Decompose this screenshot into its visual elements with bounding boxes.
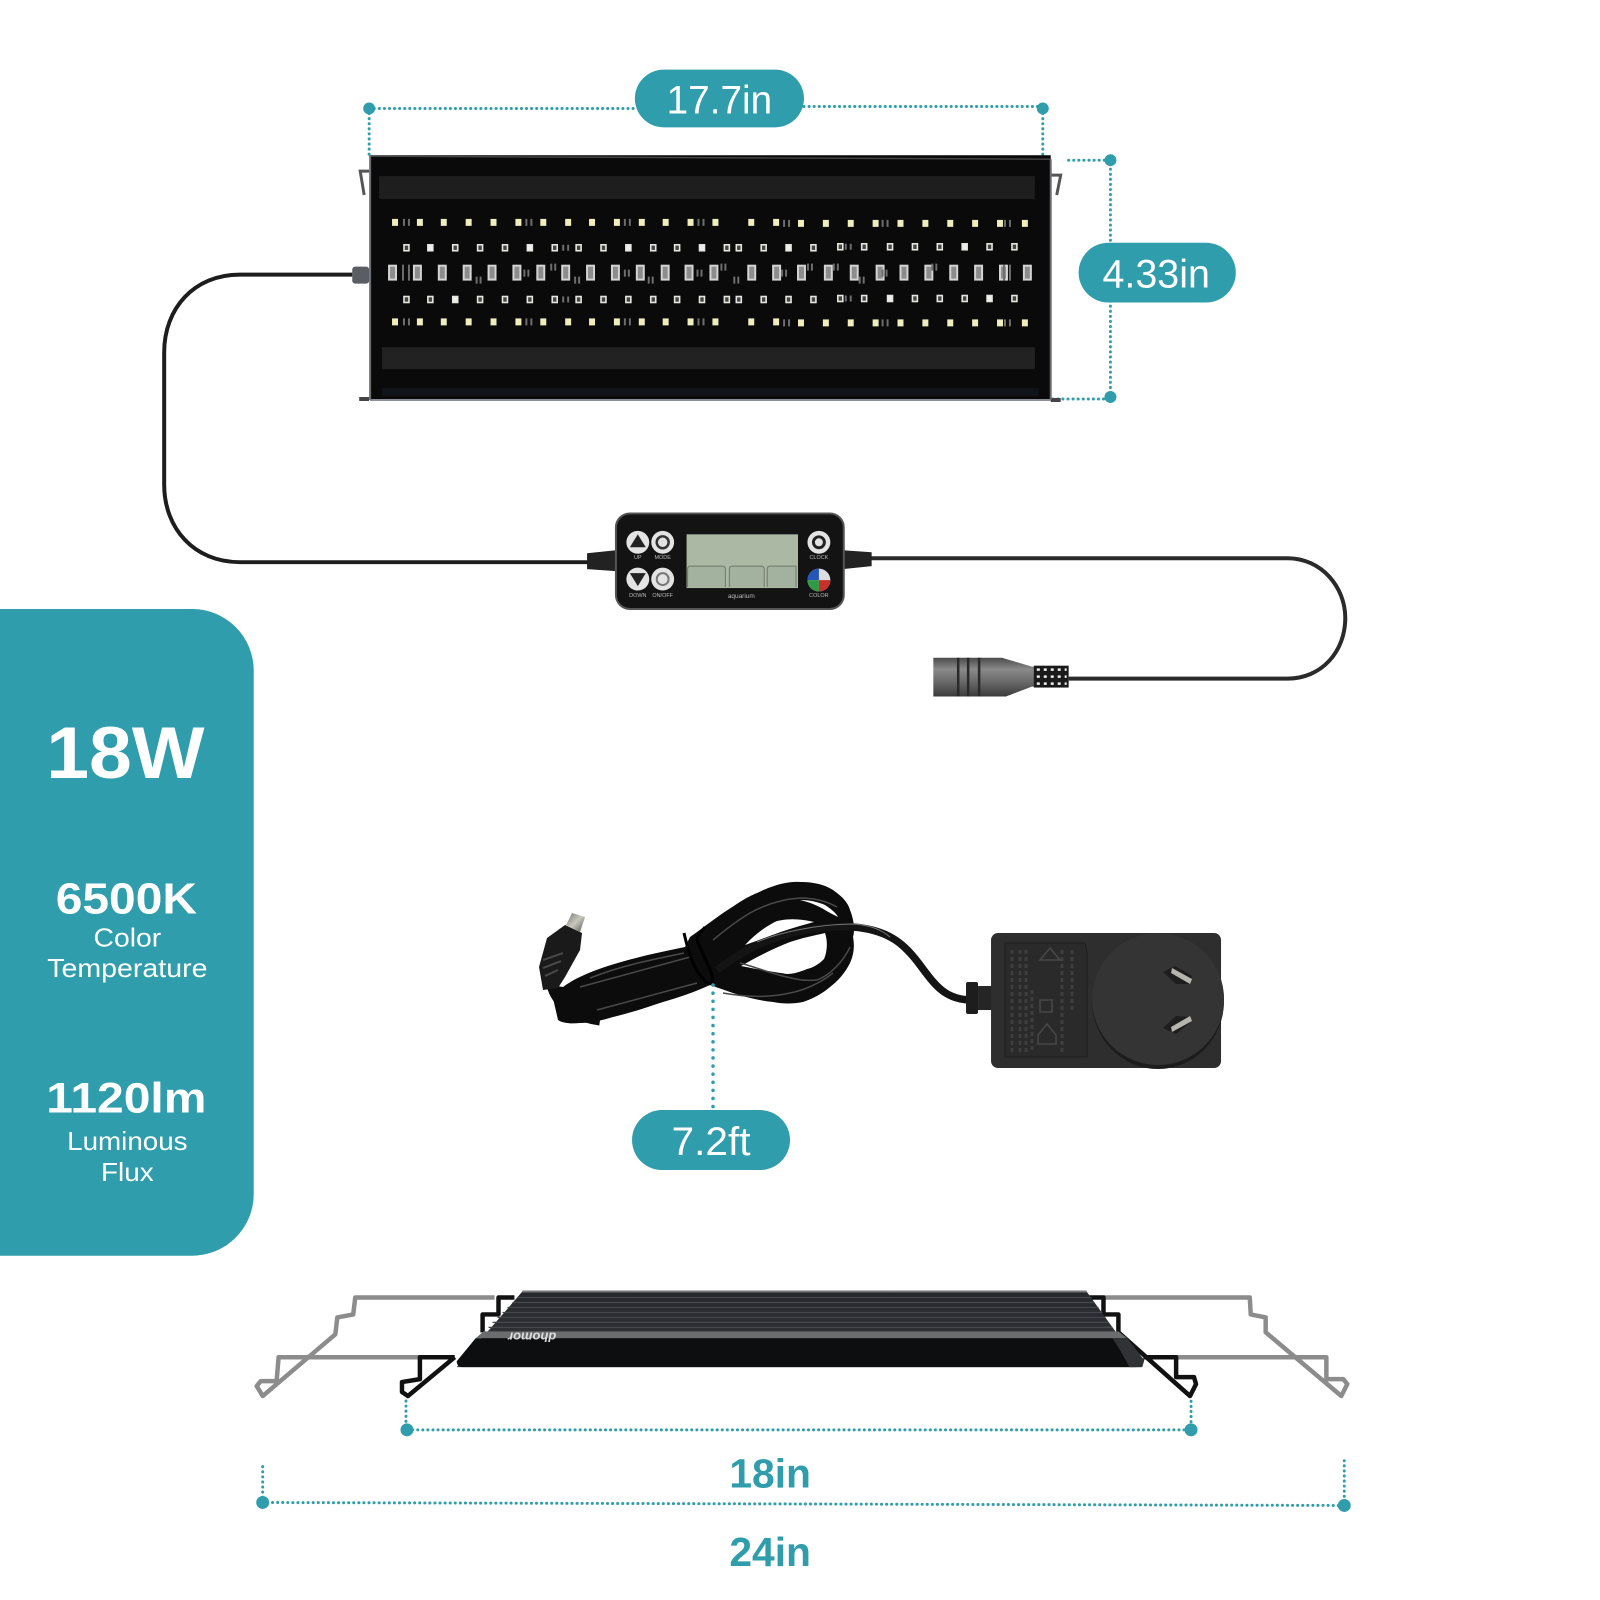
button labels: UP — [634, 555, 642, 561]
dimension: 7.2ft cable length — [632, 985, 790, 1170]
wattage: 18W — [46, 711, 205, 794]
adapter body — [966, 933, 1224, 1069]
power cable right section with DC connector — [870, 558, 1345, 697]
DC jack — [539, 913, 585, 990]
button labels: DOWN — [629, 593, 647, 599]
dimension: 18in: 18in — [729, 1451, 811, 1497]
LED row 5 — [392, 318, 1028, 326]
LED row 1 — [392, 219, 1028, 227]
luminous flux: Flux — [101, 1159, 154, 1187]
black short brackets — [402, 1298, 1196, 1396]
button labels: COLOR — [809, 593, 829, 599]
LED row 2 — [404, 244, 1017, 251]
dimension: 7.2ft cable length: 7.2ft — [672, 1120, 751, 1164]
small secondary LED chips — [403, 219, 1010, 326]
plug pins — [1163, 966, 1192, 1034]
color temperature: Color — [94, 924, 162, 952]
dimension: 24in: 24in — [729, 1529, 811, 1575]
LED light fixture top view — [352, 155, 1061, 402]
luminous flux — [46, 1074, 206, 1187]
control buttons — [626, 531, 830, 591]
fixture end cap — [1112, 1338, 1144, 1367]
button labels: ON/OFF — [652, 593, 674, 599]
luminous flux: 1120lm — [46, 1074, 206, 1122]
dimension: 18in — [400, 1401, 1198, 1497]
LED row 3 — [389, 266, 1031, 280]
fixture top face — [457, 1292, 1141, 1367]
fixture front stripe — [476, 1331, 1127, 1338]
gray extended brackets — [257, 1298, 1347, 1396]
side-mount fixture with extended brackets — [257, 1292, 1347, 1396]
cable grommet — [352, 267, 369, 284]
LCD screen — [687, 534, 798, 588]
dimension: 4.33in height — [1053, 154, 1236, 403]
color temperature — [47, 874, 207, 983]
zip tie — [684, 927, 713, 984]
button labels: aquarium — [728, 593, 755, 600]
button labels: CLOCK — [809, 555, 829, 561]
color button — [807, 569, 830, 592]
dimension: 17.7in width — [363, 70, 1049, 157]
dimension: 24in — [256, 1461, 1351, 1575]
cord exiting to adapter — [717, 927, 972, 1000]
button glyphs — [630, 534, 824, 586]
button labels: MODE — [654, 555, 671, 561]
specs panel — [0, 609, 254, 1256]
dimension: 4.33in height: 4.33in — [1102, 253, 1210, 297]
rating label — [1005, 943, 1087, 1057]
dimension: 17.7in width: 17.7in — [667, 78, 772, 122]
color temperature: 6500K — [56, 874, 197, 923]
round plug base — [1092, 933, 1224, 1069]
button labels — [629, 555, 829, 600]
coiled cord bundle — [550, 882, 854, 1023]
fixture front face — [457, 1338, 1141, 1367]
color temperature: Temperature — [47, 955, 207, 983]
power cable left section — [164, 275, 589, 562]
cord highlight — [757, 924, 890, 942]
brand mark: dhomor — [507, 1329, 556, 1344]
LED row 4 — [404, 296, 1017, 302]
power adapter — [539, 882, 1224, 1069]
luminous flux: Luminous — [67, 1128, 188, 1156]
remote controller — [587, 513, 872, 609]
